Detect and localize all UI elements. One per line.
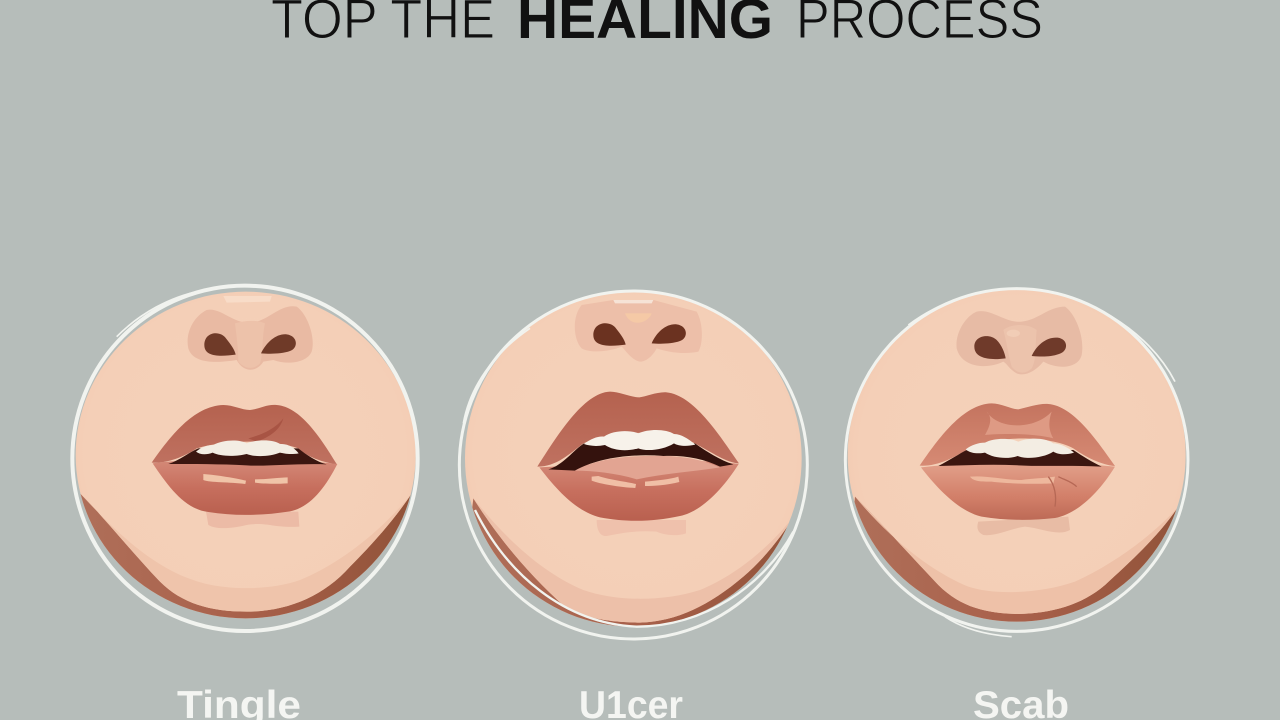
nose	[956, 307, 1082, 374]
lips	[920, 403, 1115, 535]
panel: tingle stage face	[60, 280, 430, 640]
face skin	[76, 292, 416, 618]
outer sketch ring	[845, 288, 1188, 637]
outer sketch ring	[72, 286, 418, 631]
face skin	[848, 290, 1186, 622]
title	[271, 0, 1043, 50]
lips	[152, 405, 337, 528]
nose	[575, 300, 702, 362]
panel: scab stage face	[835, 280, 1205, 640]
nose	[188, 296, 313, 370]
face skin	[465, 292, 802, 626]
outer sketch ring	[459, 291, 807, 639]
lips	[537, 392, 739, 536]
panel: ulcer stage face	[450, 280, 820, 640]
